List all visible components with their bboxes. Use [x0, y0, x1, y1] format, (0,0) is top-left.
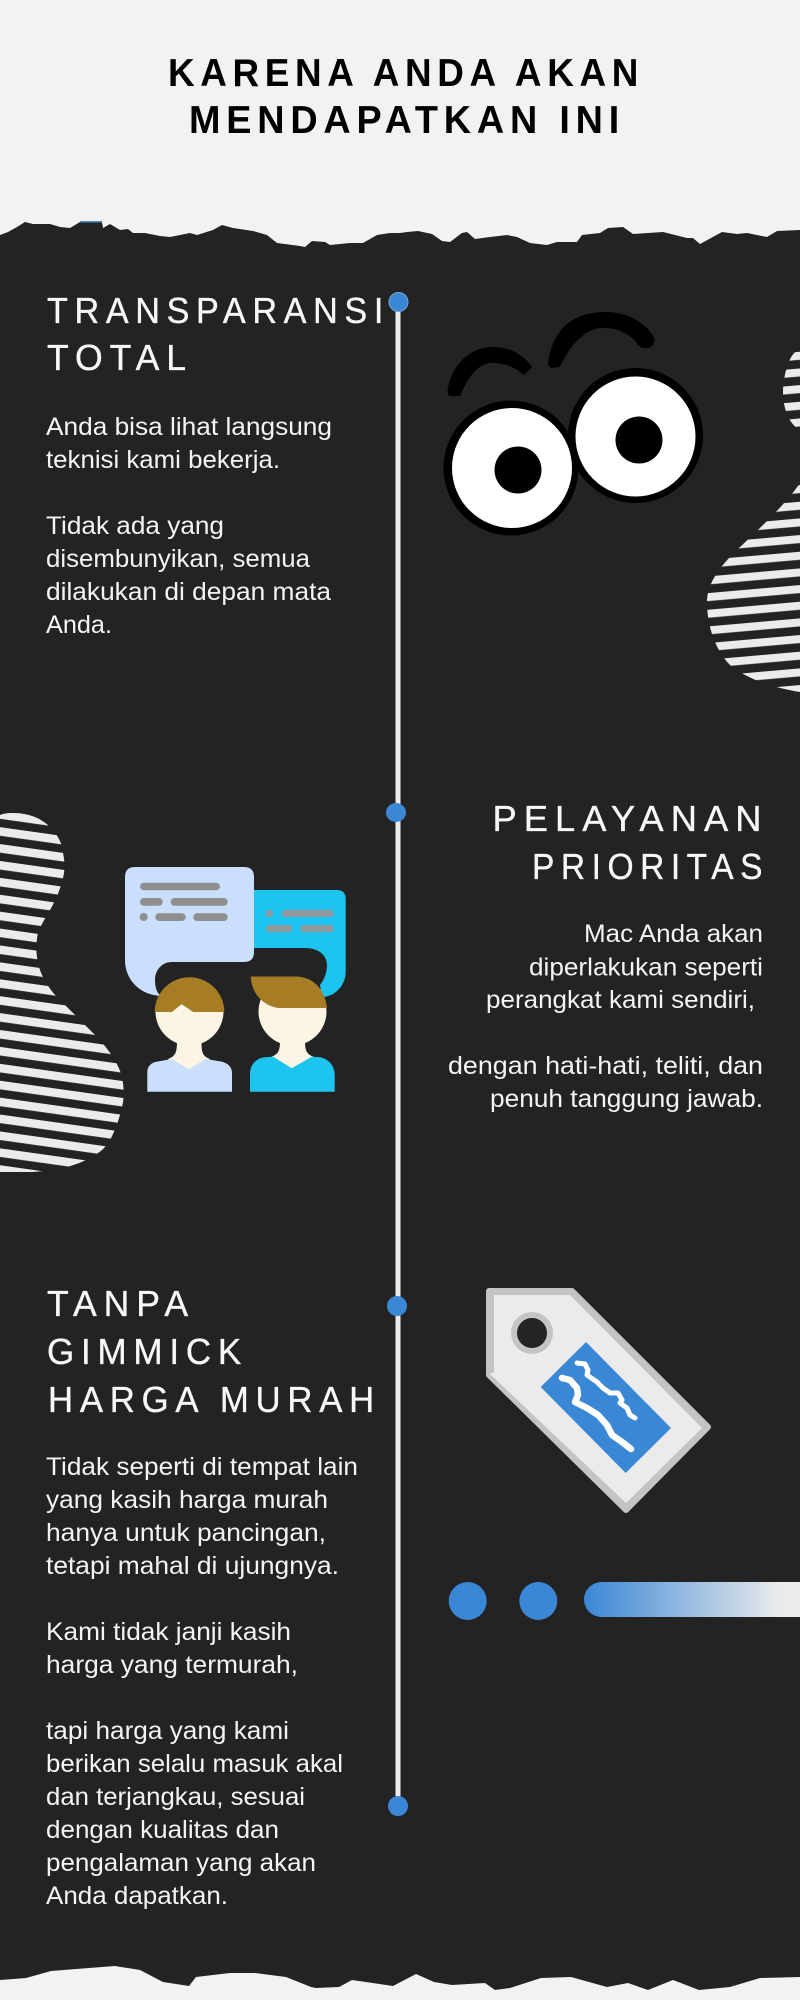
heading: transparansi total	[47, 290, 390, 378]
heading: pelayanan prioritas: PRIORITAS	[532, 846, 769, 887]
heading: pelayanan prioritas	[492, 798, 769, 887]
title: KARENA ANDA AKAN	[168, 52, 644, 95]
person: left	[147, 977, 232, 1092]
timeline marker 2	[386, 803, 406, 822]
text block: gimmick: harga yang termurah,	[46, 1651, 298, 1679]
text block: gimmick: dengan kualitas dan	[46, 1816, 279, 1844]
text block: gimmick: Tidak seperti di tempat lain	[46, 1453, 358, 1481]
text block: transparansi: dilakukan di depan mata	[46, 578, 331, 606]
heading: tanpa gimmick harga murah: HARGA MURAH	[48, 1379, 381, 1420]
text block: gimmick: tetapi mahal di ujungnya.	[46, 1552, 339, 1580]
text block: gimmick: berikan selalu masuk akal	[46, 1750, 343, 1778]
text block: transparansi: Tidak ada yang	[46, 512, 224, 540]
icon: price tag	[489, 1291, 708, 1510]
heading: transparansi total: TRANSPARANSI	[47, 290, 390, 331]
text block: gimmick: yang kasih harga murah	[46, 1486, 328, 1514]
icon: two people chatting	[125, 867, 346, 1092]
text block: gimmick: pengalaman yang akan	[46, 1849, 316, 1877]
title	[168, 52, 644, 142]
heading: tanpa gimmick harga murah	[47, 1283, 381, 1420]
text block: gimmick	[46, 1453, 358, 1910]
heading: tanpa gimmick harga murah: GIMMICK	[47, 1331, 248, 1372]
text block: transparansi	[46, 413, 332, 639]
panel: transparansi total	[46, 290, 703, 639]
text block: gimmick: Anda dapatkan.	[46, 1882, 228, 1910]
panel: tanpa gimmick harga murah	[46, 1283, 800, 1910]
speech bubble: light	[125, 867, 254, 996]
panel: pelayanan prioritas	[125, 798, 769, 1113]
text block: transparansi: Anda.	[46, 611, 112, 639]
text block: pelayanan	[448, 920, 763, 1113]
text block: gimmick: tapi harga yang kami	[46, 1717, 289, 1745]
timeline marker 4	[388, 1796, 408, 1816]
text block: pelayanan: diperlakukan seperti	[529, 954, 763, 982]
text block: pelayanan: penuh tanggung jawab.	[490, 1085, 763, 1113]
heading: tanpa gimmick harga murah: TANPA	[47, 1283, 195, 1324]
decoration: dots and gradient bar	[449, 1582, 800, 1620]
heading: pelayanan prioritas: PELAYANAN	[492, 798, 768, 839]
icon: cartoon eyes	[444, 312, 703, 536]
text block: transparansi: Anda bisa lihat langsung	[46, 413, 332, 441]
heading: transparansi total: TOTAL	[47, 337, 193, 378]
person: right	[250, 976, 335, 1092]
speech bubble: blue	[254, 890, 346, 997]
text block: gimmick: hanya untuk pancingan,	[46, 1519, 326, 1547]
text block: pelayanan: Mac Anda akan	[584, 920, 763, 948]
text block: gimmick: dan terjangkau, sesuai	[46, 1783, 305, 1811]
timeline	[386, 292, 408, 1816]
text block: pelayanan: perangkat kami sendiri,	[486, 986, 755, 1014]
timeline marker 1	[389, 292, 408, 312]
decorative striped blob: left	[0, 813, 124, 1172]
timeline marker 3	[387, 1296, 407, 1316]
text block: transparansi: disembunyikan, semua	[46, 545, 310, 573]
text block: transparansi: teknisi kami bekerja.	[46, 446, 280, 474]
text block: pelayanan: dengan hati-hati, teliti, dan	[448, 1052, 763, 1080]
title: MENDAPATKAN INI	[189, 99, 625, 142]
decorative striped blob: right	[707, 350, 800, 692]
text block: gimmick: Kami tidak janji kasih	[46, 1618, 291, 1646]
